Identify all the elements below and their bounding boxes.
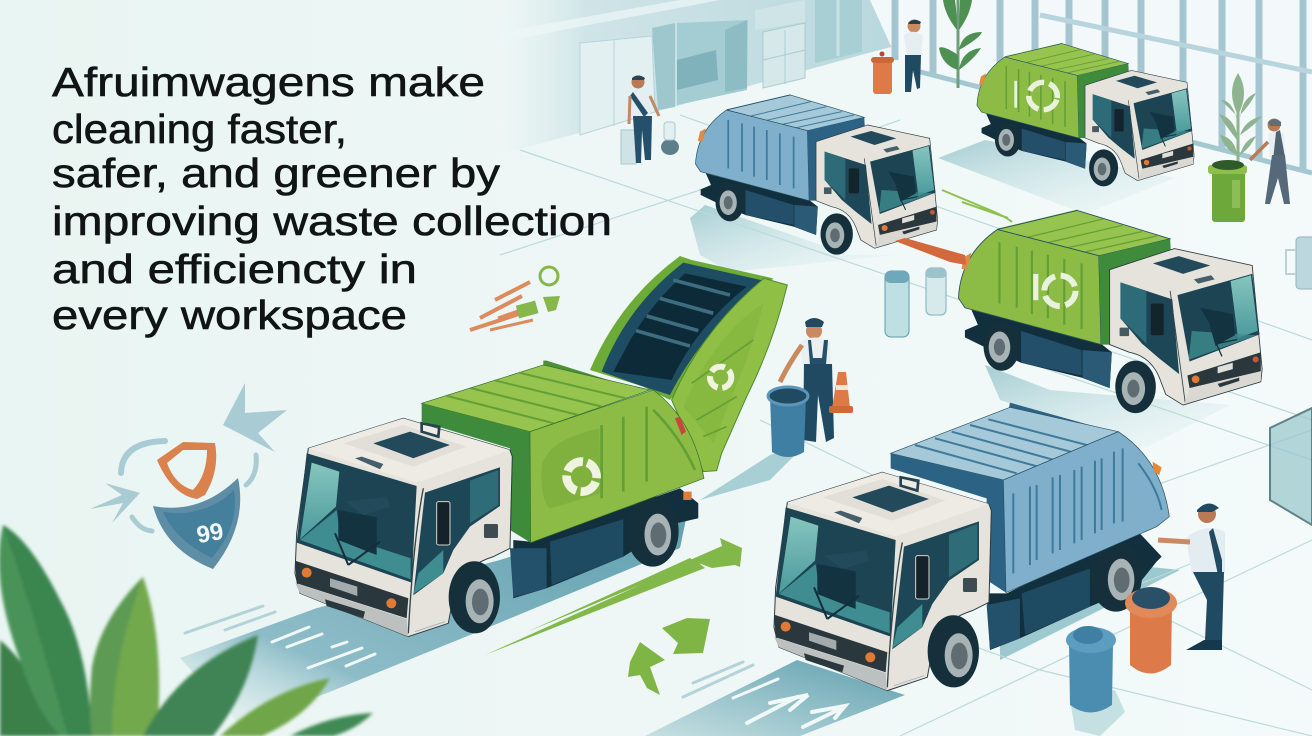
leaf: tip bbox=[290, 713, 373, 736]
truck: big green bbox=[295, 256, 787, 637]
truck: green top right bbox=[977, 43, 1194, 186]
body bbox=[422, 361, 704, 543]
plant foliage bbox=[0, 525, 373, 736]
leaf: olive bbox=[90, 577, 159, 736]
title: cleaning faster, bbox=[52, 106, 347, 152]
truck: big blue bbox=[774, 403, 1169, 691]
orange pad bbox=[895, 238, 966, 265]
orange bin: back bbox=[871, 52, 894, 94]
worker with bin bbox=[780, 318, 834, 442]
chassis bbox=[510, 488, 698, 598]
worker at rear bbox=[1158, 503, 1225, 650]
leaf: dark centre bbox=[143, 635, 258, 736]
glass wall bbox=[870, 0, 1312, 173]
green bin bbox=[1208, 160, 1247, 222]
chassis bbox=[987, 530, 1162, 650]
icon: shield badge: 99 bbox=[195, 518, 226, 549]
truck: blue back bbox=[695, 94, 938, 255]
arrow: green long bbox=[485, 538, 742, 655]
cab bbox=[295, 418, 512, 637]
title: Afruimwagens make bbox=[52, 59, 485, 105]
icon: recycling logo bbox=[562, 457, 601, 496]
orange bin front bbox=[1125, 587, 1177, 674]
worker: back centre bbox=[904, 20, 923, 92]
title: every workspace bbox=[52, 292, 407, 338]
cab bbox=[774, 472, 991, 691]
traffic cone bbox=[829, 372, 853, 413]
back building wall bbox=[500, 0, 895, 152]
green squiggle arrow bbox=[942, 190, 1012, 222]
icon: shield badge bbox=[90, 383, 287, 569]
leaf: far left bbox=[0, 640, 60, 736]
floor shadows bbox=[180, 140, 1230, 736]
body bbox=[891, 403, 1169, 593]
icon: recycling logo bbox=[1014, 79, 1060, 113]
icon: green recycling arrows bbox=[628, 618, 710, 695]
glass box: right edge bbox=[1270, 408, 1312, 525]
bottles bbox=[885, 268, 946, 337]
title: improving waste collection bbox=[52, 198, 612, 244]
blue bin by worker bbox=[768, 387, 808, 457]
worker: back left bbox=[621, 76, 679, 164]
icon: recycling logo bbox=[1033, 274, 1076, 306]
leaf: tall bbox=[0, 525, 92, 736]
title: safer, and greener by bbox=[52, 150, 501, 196]
title: and efficiencty in bbox=[52, 246, 417, 292]
floor lines bbox=[500, 115, 1312, 736]
raised hopper bbox=[590, 256, 787, 472]
leaf: light bbox=[220, 678, 330, 736]
plant: right with bin bbox=[1208, 73, 1262, 222]
icon: speed lines and recycling bbox=[470, 267, 560, 330]
title bbox=[52, 59, 612, 338]
road markings bbox=[185, 606, 845, 727]
worker: right bbox=[1250, 118, 1290, 204]
blue bin front bbox=[1066, 626, 1116, 712]
device: right edge bbox=[1286, 237, 1312, 289]
truck: green middle right bbox=[958, 210, 1262, 413]
plant: back bbox=[939, 0, 982, 88]
